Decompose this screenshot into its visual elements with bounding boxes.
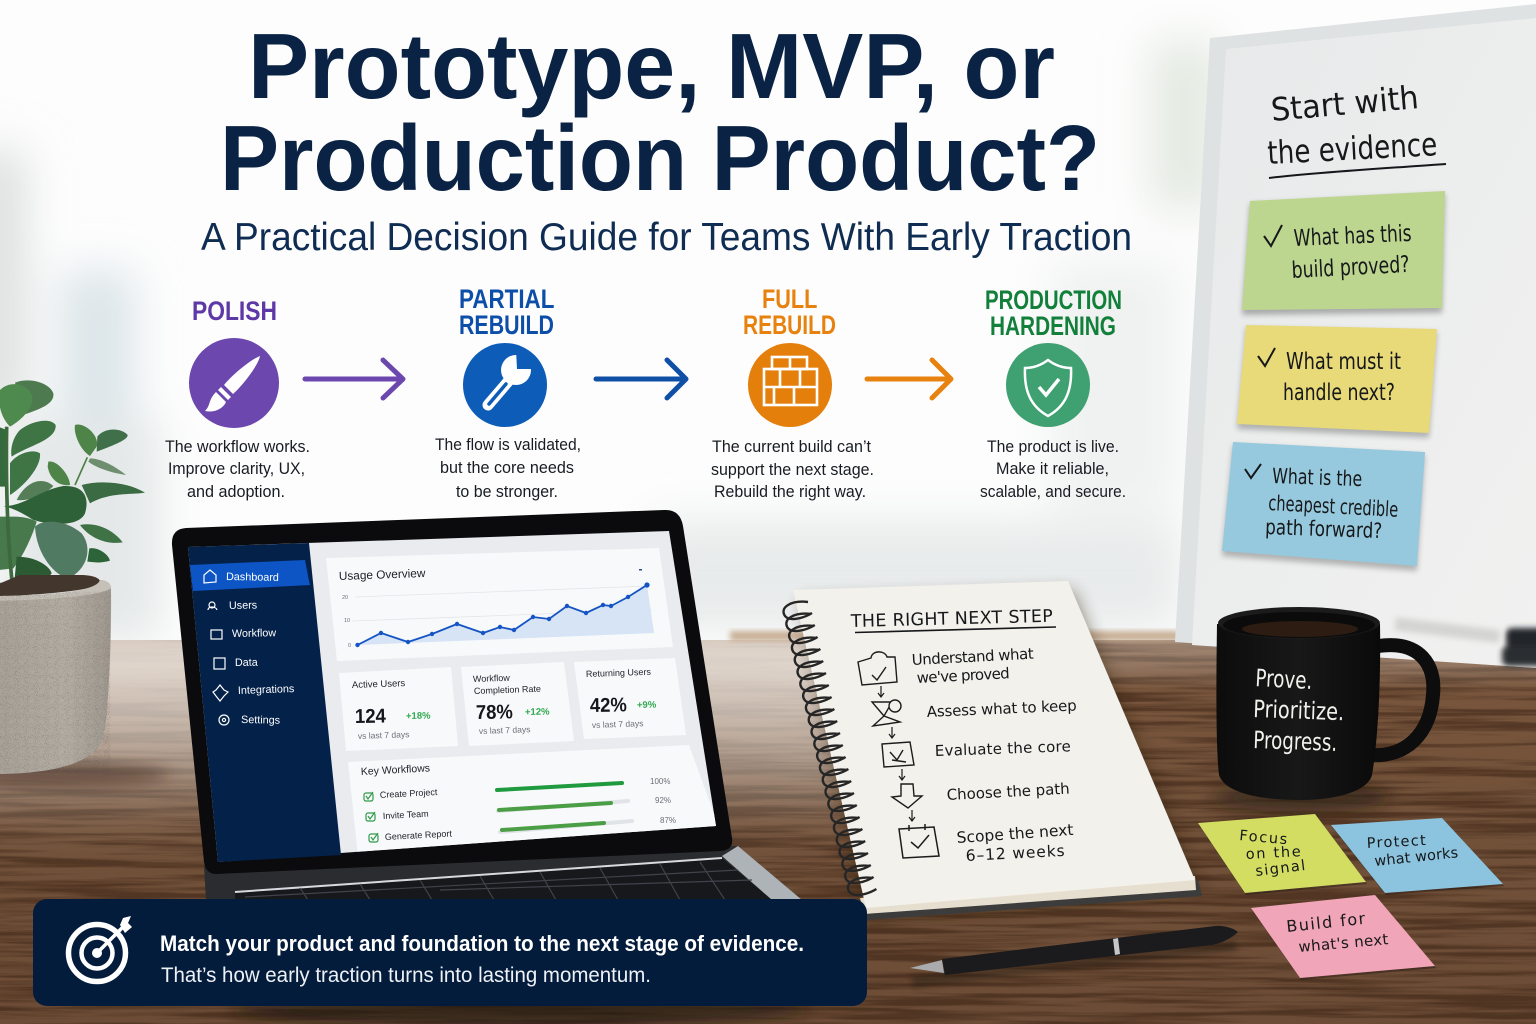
- whiteboard: [1175, 4, 1536, 668]
- sticky: what has this build proved: [1242, 191, 1445, 315]
- sticky: build for what's next: Build for: [1285, 909, 1366, 936]
- spiral binding: [784, 602, 876, 895]
- stage: full rebuild: REBUILD: [743, 310, 836, 340]
- icon: brick wall: [748, 343, 832, 427]
- stage: full rebuild: [711, 284, 879, 501]
- sidebar: [188, 543, 341, 862]
- icon: paint brush: [189, 338, 279, 428]
- mug text: Prove.: [1255, 664, 1313, 695]
- stage: partial rebuild: PARTIAL: [459, 284, 554, 314]
- arrow: polish to partial rebuild: [305, 360, 403, 398]
- card: workflow completion rate: [461, 662, 574, 746]
- pen: [910, 926, 1238, 982]
- card: key workflows: 92%: [655, 796, 671, 805]
- stage: full rebuild: The current build can’t: [712, 438, 871, 456]
- sticky: what must it handle next: handle next?: [1283, 380, 1395, 406]
- card: active users: 124: [355, 705, 387, 728]
- stage: polish: The workflow works.: [165, 438, 310, 456]
- sidebar: Users: [229, 599, 258, 612]
- card: key workflows: 100%: [650, 777, 670, 786]
- notebook heading: THE RIGHT NEXT STEP: [850, 607, 1053, 632]
- card: key workflows: 87%: [660, 816, 676, 825]
- stage: polish: Improve clarity, UX,: [168, 460, 305, 478]
- arrow: full rebuild to production hardening: [867, 360, 951, 398]
- card: active users: vs last 7 days: [358, 729, 410, 741]
- card: returning users: 42%: [590, 694, 627, 717]
- sidebar: Dashboard: [226, 571, 279, 584]
- sticky: what must it handle next: What must it: [1286, 349, 1401, 375]
- step 1: understand: [858, 645, 1034, 697]
- card: returning users: [574, 658, 686, 739]
- sidebar: Settings: [241, 714, 281, 727]
- step 5: scope: Scope the next: [956, 821, 1074, 847]
- card: returning users: Returning Users: [586, 667, 652, 679]
- card: usage overview: 20: [342, 595, 348, 601]
- sidebar: Data: [235, 657, 258, 669]
- stage: production hardening: Make it reliable,: [996, 460, 1109, 478]
- stage: partial rebuild: The flow is validated,: [435, 436, 581, 454]
- wooden table: [0, 625, 1536, 1024]
- stage: polish: [165, 296, 315, 501]
- sticky: what has this build proved: What has this: [1293, 221, 1412, 252]
- stage: production hardening: PRODUCTION: [985, 285, 1122, 315]
- background: blurred window: [0, 0, 1536, 660]
- card: workflow completion rate: 78%: [476, 701, 513, 724]
- step 3: evaluate: [882, 737, 1071, 780]
- mug text: Progress.: [1253, 726, 1338, 757]
- card: returning users: vs last 7 days: [592, 718, 644, 730]
- stage: production hardening: The product is live.: [987, 438, 1119, 456]
- plant leaves: [0, 380, 145, 593]
- sticky: cheapest credible path: [1222, 442, 1425, 571]
- sticky: protect what works: what works: [1374, 845, 1459, 870]
- stage: full rebuild: support the next stage.: [711, 461, 874, 479]
- whiteboard heading: the evidence: [1266, 125, 1438, 172]
- stage: partial rebuild: to be stronger.: [456, 483, 558, 501]
- step 4: choose: Choose the path: [946, 780, 1070, 804]
- step 4: choose: [892, 780, 1070, 821]
- card: workflow completion rate: vs last 7 days: [479, 724, 531, 736]
- stage: production hardening: HARDENING: [990, 311, 1116, 341]
- callout banner: [33, 899, 867, 1006]
- marker tray: [1395, 617, 1536, 666]
- sidebar: Workflow: [232, 627, 276, 640]
- card: usage overview: [326, 548, 673, 661]
- laptop screen: [188, 531, 720, 862]
- card: usage overview: 0: [348, 643, 351, 649]
- sticky: focus on the signal: on the: [1245, 844, 1301, 863]
- card: active users: +18%: [406, 711, 431, 722]
- callout text: Match your product and foundation to the next stage of evidence.: [160, 931, 804, 956]
- step 1: understand: Understand what: [911, 645, 1034, 669]
- sticky: build for what's next: [1251, 895, 1436, 980]
- mug handle: [1372, 645, 1433, 755]
- card: usage overview: 10: [344, 618, 350, 624]
- card: workflow completion rate: Workflow: [473, 673, 510, 684]
- line chart: [355, 582, 654, 647]
- notebook: [784, 581, 1202, 922]
- card: usage overview: Usage Overview: [339, 566, 426, 583]
- arrow: partial to full rebuild: [596, 360, 686, 398]
- card: key workflows: Create Project: [380, 787, 438, 800]
- pot: [0, 575, 111, 774]
- icon: shield: [1006, 343, 1090, 427]
- step 1: understand: we've proved: [916, 664, 1010, 687]
- stage: full rebuild: Rebuild the right way.: [714, 483, 866, 501]
- stage: production hardening: [980, 285, 1130, 501]
- laptop base and keyboard: [204, 846, 810, 1024]
- stage: production hardening: scalable, and secure.: [980, 483, 1126, 501]
- laptop lid: [172, 510, 732, 874]
- laptop: [172, 510, 810, 1024]
- step 2: assess: [872, 696, 1077, 738]
- sticky: build for what's next: what's next: [1298, 930, 1389, 956]
- subtitle: A Practical Decision Guide for Teams With Early Traction: [201, 216, 1132, 259]
- whiteboard heading: Start with: [1269, 78, 1420, 129]
- sticky: protect what works: Protect: [1366, 833, 1426, 852]
- icon: wrench: [463, 343, 547, 427]
- sticky: cheapest credible path: cheapest credible: [1268, 491, 1399, 522]
- callout text: [160, 931, 804, 987]
- sidebar: Integrations: [238, 683, 295, 697]
- stage: partial rebuild: but the core needs: [440, 459, 574, 477]
- step 2: assess: Assess what to keep: [926, 696, 1077, 721]
- sticky: protect what works: [1331, 818, 1504, 895]
- stage: partial rebuild: [435, 284, 586, 501]
- card: active users: [339, 667, 458, 751]
- card: workflow completion rate: +12%: [525, 707, 550, 718]
- card: key workflows: Invite Team: [383, 809, 429, 821]
- card: workflow completion rate: Completion Rate: [474, 684, 541, 696]
- step 5: scope: [899, 821, 1074, 865]
- sticky: focus on the signal: signal: [1255, 858, 1306, 880]
- stage: polish: and adoption.: [187, 483, 285, 501]
- callout text: That’s how early traction turns into lasting momentum.: [161, 963, 651, 987]
- sticky: what has this build proved: build proved?: [1291, 252, 1410, 284]
- sticky: what must it handle next: [1237, 325, 1437, 438]
- potted plant: [0, 380, 170, 787]
- stage: partial rebuild: REBUILD: [459, 310, 554, 340]
- card: key workflows: [348, 745, 720, 856]
- mug: [1210, 607, 1433, 812]
- sticky: focus on the signal: Focus: [1239, 828, 1288, 848]
- stage: full rebuild: FULL: [762, 284, 817, 314]
- sticky: cheapest credible path: What is the: [1272, 464, 1363, 491]
- icon: target with arrow: [68, 916, 132, 982]
- title: Prototype, MVP, or: [248, 14, 1055, 118]
- whiteboard heading: [1266, 78, 1446, 178]
- sticky: focus on the signal: [1198, 814, 1367, 895]
- card: returning users: +9%: [637, 700, 657, 711]
- mug text: [1253, 664, 1345, 757]
- title: Production Product?: [220, 106, 1100, 210]
- step 5: scope: 6–12 weeks: [965, 842, 1065, 865]
- mug text: Prioritize.: [1253, 695, 1345, 726]
- sticky: cheapest credible path: path forward?: [1265, 515, 1383, 543]
- stage: polish: POLISH: [192, 296, 277, 326]
- card: key workflows: Key Workflows: [361, 762, 430, 778]
- card: active users: Active Users: [352, 678, 406, 691]
- card: key workflows: Generate Report: [385, 828, 453, 842]
- title: [220, 14, 1100, 210]
- step 3: evaluate: Evaluate the core: [935, 737, 1071, 760]
